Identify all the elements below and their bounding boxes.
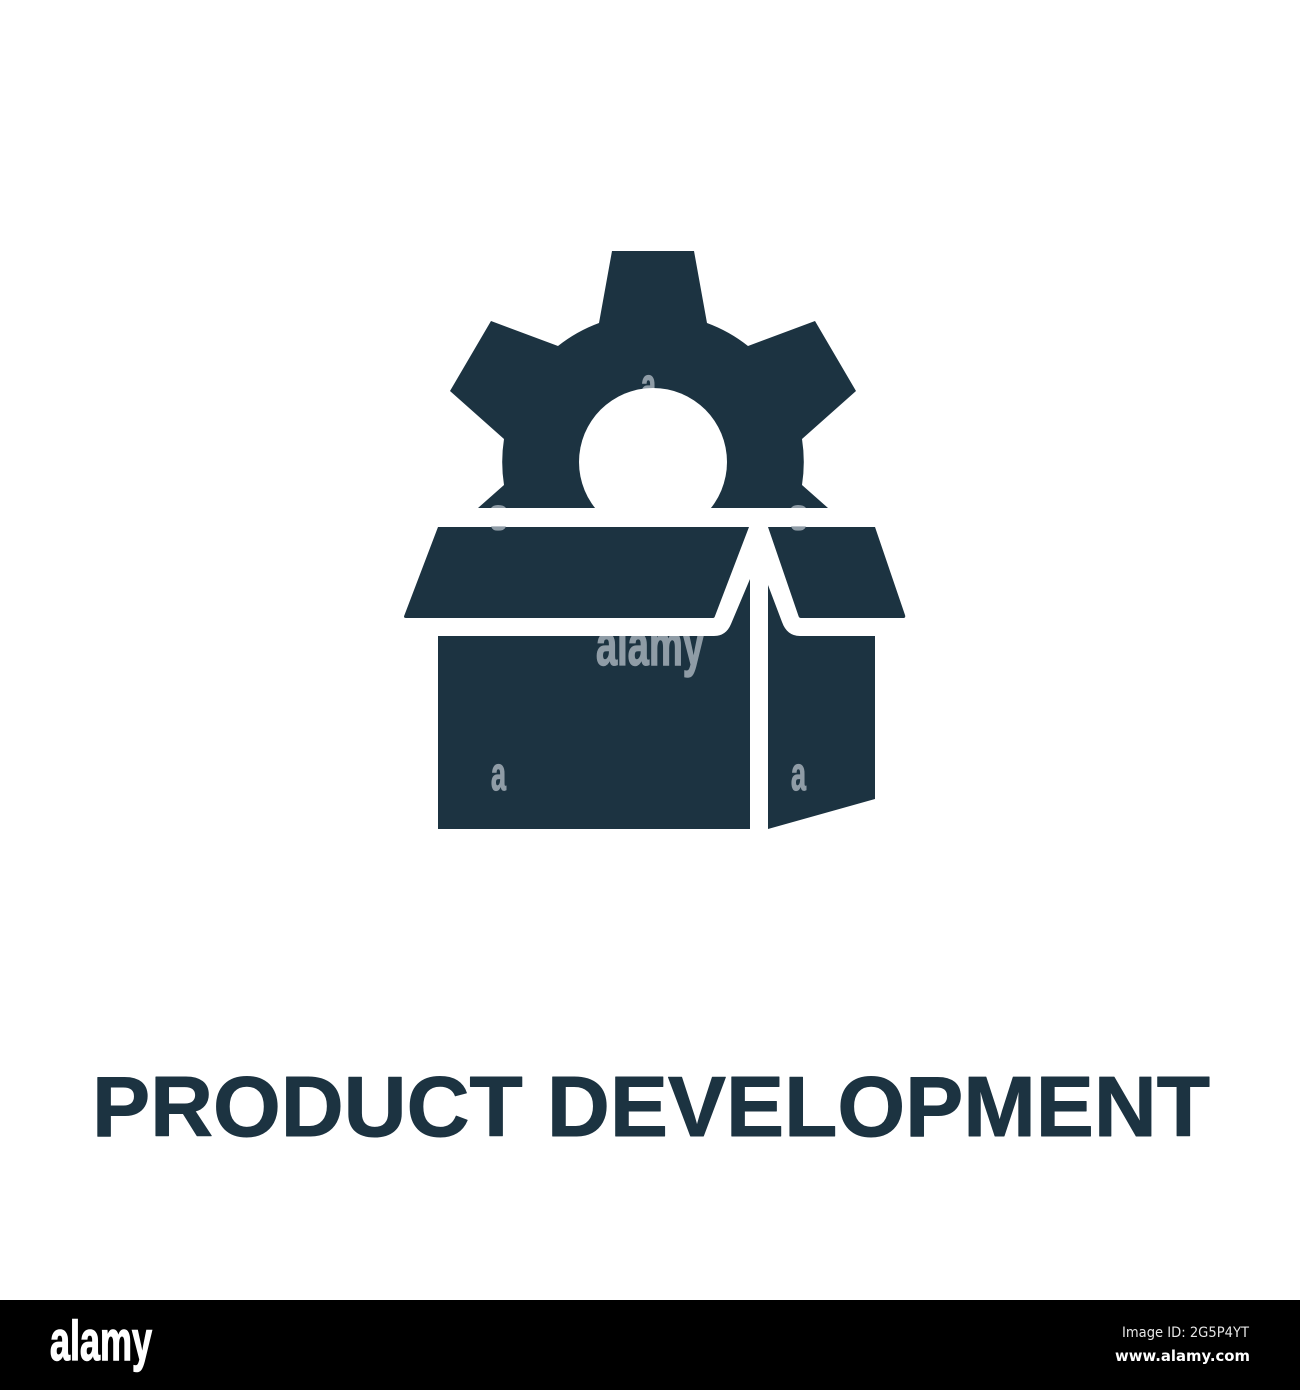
watermark: marks on box: [491, 527, 806, 800]
title: PRODUCT DEVELOPMENT: [92, 1060, 1210, 1155]
watermark: alamy on box: alamy: [596, 613, 704, 678]
icon: left box flap: [404, 527, 749, 618]
watermark: marks on box: a: [791, 747, 806, 800]
image id: Image ID: 2G5P4YT: [1122, 1325, 1249, 1341]
website: www.alamy.com: [1115, 1347, 1250, 1365]
icon: box front face: [438, 579, 750, 829]
icon: hidden watermark marks on gear base: [491, 505, 806, 508]
footer logo: alamy: [50, 1309, 152, 1372]
watermark: marks on box: a: [491, 747, 506, 800]
icon: gear in open box: [404, 251, 905, 829]
icon: gear: a: [641, 358, 656, 411]
footer bar: [0, 1300, 1300, 1390]
icon: right box flap: [768, 527, 905, 618]
icon: gear: [450, 251, 856, 536]
icon: box side face: [768, 585, 875, 829]
